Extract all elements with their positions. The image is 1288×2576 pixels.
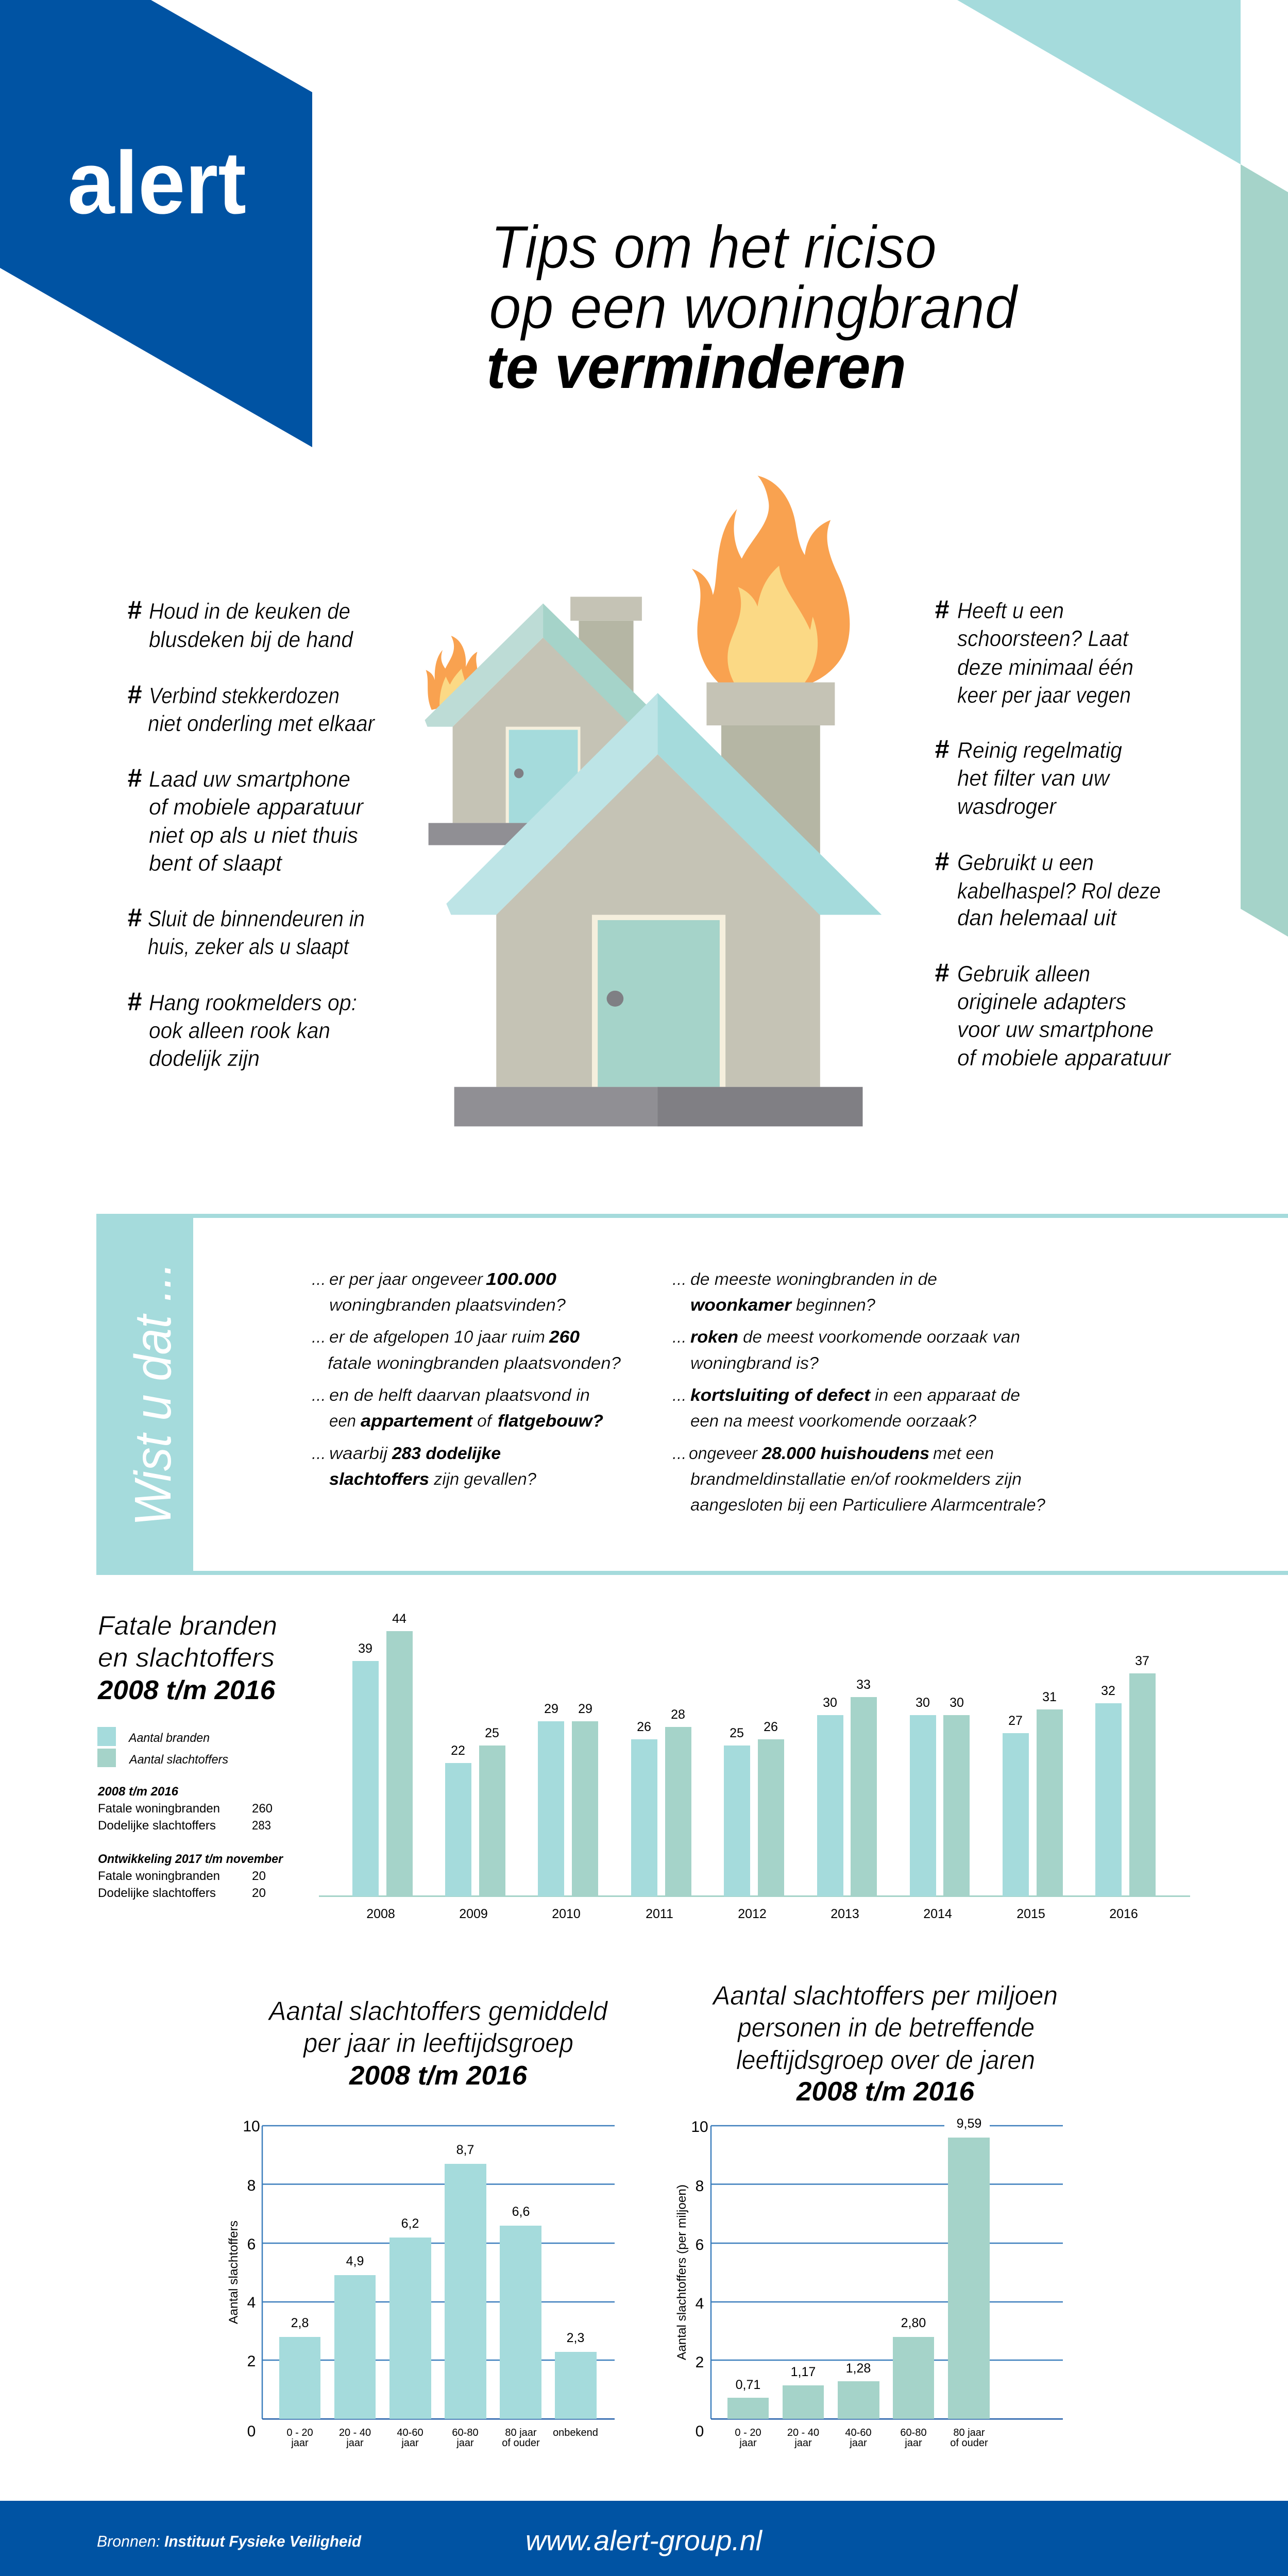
y axis labels: 0 <box>696 2423 704 2440</box>
y axis labels: 2 <box>696 2354 704 2371</box>
x axis labels: 0 - 20 <box>286 2427 313 2438</box>
bars 2014: 2014 <box>923 1907 952 1921</box>
bars 2009: 25 <box>485 1726 499 1740</box>
y axis labels: 10 <box>243 2118 260 2135</box>
bars 2016: 2016 <box>1109 1907 1138 1921</box>
tip: wasdroger: het filter van uw <box>957 766 1111 791</box>
title: op een woningbrand <box>489 274 1019 342</box>
y axis labels: 0 <box>247 2423 256 2440</box>
heading: slachtoffers gemiddeld: Aantal slachtoffers gemiddeld <box>267 1996 608 2026</box>
value labels: 2,3 <box>567 2331 584 2345</box>
tip: adapters: of mobiele apparatuur <box>957 1045 1172 1071</box>
tips right column <box>935 595 1172 1071</box>
summary table: Ontwikkeling 2017 t/m november <box>98 1852 284 1866</box>
tip: smartphone: of mobiele apparatuur <box>149 794 364 820</box>
back house body <box>453 638 645 823</box>
sources: Bronnen: <box>97 2532 160 2550</box>
y axis labels: Aantal slachtoffers <box>227 2221 241 2324</box>
bars 2011 <box>631 1707 691 1921</box>
facts column 1: ... <box>312 1444 326 1463</box>
front house door <box>592 915 725 1087</box>
facts column 2: kortsluiting of defect <box>690 1385 871 1404</box>
y axis labels: 10 <box>691 2119 708 2136</box>
tip: schoorsteen: schoorsteen? Laat <box>957 626 1129 651</box>
heading: slachtoffers per miljoen: Aantal slachtoffers per miljoen <box>711 1981 1058 2011</box>
tip: smartphone: Laad uw smartphone <box>149 767 350 792</box>
bars 2010: 29 <box>578 1702 592 1716</box>
tip: blusdeken <box>127 596 353 652</box>
blue logo panel <box>0 0 312 447</box>
bars 2012: 25 <box>730 1726 744 1740</box>
value labels: 8,7 <box>456 2143 474 2157</box>
facts column 1: ... <box>312 1327 326 1346</box>
back house base <box>429 823 649 845</box>
tip: adapters <box>935 958 1172 1071</box>
tip: blusdeken: blusdeken bij de hand <box>149 627 353 652</box>
value labels: 6,6 <box>512 2205 530 2219</box>
bars 2009: 22 <box>451 1743 465 1758</box>
x axis labels: 0 - 20 <box>735 2427 761 2438</box>
summary table: 260 <box>252 1802 273 1816</box>
facts column 2: ... <box>672 1444 687 1463</box>
facts column 2: beginnen? <box>796 1295 876 1314</box>
summary table: Dodelijke slachtoffers <box>98 1819 216 1833</box>
facts column 1: flatgebouw? <box>498 1411 603 1430</box>
y axis labels: 6 <box>696 2236 704 2253</box>
bars 2008 <box>352 1612 413 1921</box>
facts column 2: woningbrand is? <box>690 1353 819 1372</box>
y axis labels: 6 <box>247 2236 256 2253</box>
x axis labels: jaar <box>346 2437 364 2449</box>
tip: smartphone: # <box>127 764 142 792</box>
facts column 1: 260 <box>549 1327 580 1346</box>
tip: kabelhaspel: dan helemaal uit <box>957 905 1117 930</box>
bars 2008: 39 <box>358 1641 372 1656</box>
bars 2014: 30 <box>950 1696 964 1710</box>
heading: slachtoffers gemiddeld: 2008 t/m 2016 <box>349 2061 528 2091</box>
tip: stekkerdozen: Verbind stekkerdozen <box>149 683 340 708</box>
tip: blusdeken: Houd in de keuken de <box>149 599 350 624</box>
tip: kabelhaspel: Gebruikt u een <box>957 850 1094 875</box>
facts column 1: 283 dodelijke <box>392 1444 501 1463</box>
x axis labels: 80 jaar <box>953 2427 985 2438</box>
heading: wist u dat: Wist u dat ... <box>124 1262 182 1526</box>
bars 2013 <box>817 1677 877 1921</box>
tip: schoorsteen: keer per jaar vegen <box>957 683 1131 708</box>
summary table: Fatale woningbranden <box>98 1869 220 1883</box>
bars 2011: 28 <box>671 1707 685 1722</box>
x axis labels: jaar <box>291 2437 309 2449</box>
facts column 1: woningbranden plaatsvinden? <box>329 1295 566 1314</box>
x axis labels: of ouder <box>950 2437 988 2449</box>
y axis labels: 4 <box>247 2294 256 2311</box>
y axis labels <box>675 2119 708 2440</box>
facts column 2: 28.000 huishoudens <box>761 1444 929 1463</box>
x axis labels: of ouder <box>502 2437 540 2449</box>
heading: fatale branden: 2008 t/m 2016 <box>97 1675 276 1705</box>
facts column 2: een na meest voorkomende oorzaak? <box>690 1411 977 1430</box>
x axis labels <box>735 2427 988 2449</box>
back chimney <box>570 597 642 727</box>
bars <box>727 2138 990 2419</box>
x axis labels: 60-80 <box>452 2427 479 2438</box>
facts column 1: waarbij <box>329 1444 388 1463</box>
bars 2015 <box>1003 1690 1063 1921</box>
value labels: 6,2 <box>401 2216 419 2231</box>
heading: slachtoffers gemiddeld: per jaar in leeftijdsgroep <box>302 2028 573 2058</box>
facts column 2: de meest voorkomende oorzaak van <box>743 1327 1020 1346</box>
bars 2012 <box>724 1720 784 1921</box>
summary table: 283 <box>252 1819 271 1833</box>
bar chart: fatale branden en slachtoffers <box>319 1612 1190 1921</box>
heading: slachtoffers per miljoen <box>711 1981 1058 2107</box>
tip: smartphone <box>127 764 364 876</box>
summary table <box>97 1785 284 1900</box>
facts column 2: brandmeldinstallatie en/of rookmelders zijn <box>690 1469 1022 1488</box>
tip: schoorsteen: Heeft u een <box>957 598 1064 623</box>
bars 2016 <box>1095 1654 1156 1921</box>
facts column 1: een <box>329 1411 356 1430</box>
tip: adapters: originele adapters <box>957 989 1126 1014</box>
website: www.alert-group.nl <box>526 2524 763 2556</box>
heading: fatale branden: en slachtoffers <box>98 1643 275 1673</box>
heading: slachtoffers gemiddeld <box>267 1996 608 2091</box>
value labels: 1,28 <box>846 2361 871 2376</box>
facts column 2: ... <box>672 1385 687 1404</box>
panel: wist u dat <box>96 1214 1288 1575</box>
facts column 2: ... <box>672 1269 687 1289</box>
facts column 1 <box>312 1269 621 1488</box>
tips left column <box>127 596 376 1071</box>
bars 2012: 26 <box>764 1720 778 1734</box>
legend: Aantal slachtoffers <box>128 1753 228 1767</box>
y axis labels: 2 <box>247 2353 256 2370</box>
heading: slachtoffers per miljoen: leeftijdsgroep over de jaren <box>736 2045 1035 2075</box>
value labels: 0,71 <box>736 2378 760 2392</box>
house illustration <box>425 476 882 1126</box>
bars 2010 <box>538 1702 598 1921</box>
footer <box>0 2501 1288 2576</box>
bars 2011: 26 <box>637 1720 651 1734</box>
summary table: 2008 t/m 2016 <box>97 1785 179 1799</box>
bars 2010: 2010 <box>552 1907 581 1921</box>
x axis labels: onbekend <box>553 2427 598 2438</box>
bars 2015: 27 <box>1008 1714 1023 1728</box>
x axis labels: jaar <box>401 2437 419 2449</box>
tip: binnendeuren <box>127 903 365 959</box>
y axis labels: 8 <box>696 2178 704 2195</box>
tip: binnendeuren: Sluit de binnendeuren in <box>148 906 365 931</box>
facts column 2: ... <box>672 1327 687 1346</box>
x axis labels: jaar <box>904 2437 922 2449</box>
x axis labels: jaar <box>794 2437 812 2449</box>
tip: rookmelders: Hang rookmelders op: <box>149 990 357 1015</box>
summary table: 20 <box>252 1886 266 1900</box>
bars 2012: 2012 <box>738 1907 767 1921</box>
back house roof <box>425 603 647 727</box>
x axis labels: 80 jaar <box>505 2427 537 2438</box>
bars 2013: 2013 <box>831 1907 859 1921</box>
decorative side: green band <box>1241 164 1288 937</box>
bar chart: slachtoffers per leeftijdsgroep <box>227 2118 615 2449</box>
bars 2009 <box>445 1726 505 1921</box>
tip: blusdeken: # <box>127 596 142 624</box>
bar chart: slachtoffers per miljoen <box>675 2116 1063 2449</box>
logo: alert: alert <box>67 133 246 232</box>
icon: small flame <box>426 636 478 710</box>
value labels <box>736 2116 981 2392</box>
facts column 1: ... <box>312 1385 326 1404</box>
heading: slachtoffers per miljoen: personen in de betreffende <box>737 2013 1035 2043</box>
x axis labels: 40-60 <box>845 2427 872 2438</box>
y axis labels: 8 <box>247 2177 256 2194</box>
bars 2008: 44 <box>392 1612 406 1626</box>
big chimney <box>706 682 835 903</box>
value labels: 9,59 <box>957 2116 981 2131</box>
bars 2011: 2011 <box>646 1907 673 1921</box>
tip: schoorsteen: # <box>935 595 949 624</box>
bars <box>279 2164 597 2419</box>
panel frame <box>96 1214 1288 1575</box>
tip: schoorsteen <box>935 595 1133 708</box>
tip: kabelhaspel: # <box>935 847 949 876</box>
tip: wasdroger: wasdroger <box>957 794 1057 819</box>
title: te verminderen <box>486 333 906 401</box>
facts column 2: in een apparaat de <box>875 1385 1020 1404</box>
bars 2009: 2009 <box>459 1907 488 1921</box>
x axis labels: 40-60 <box>397 2427 423 2438</box>
tip: wasdroger: Reinig regelmatig <box>957 738 1122 763</box>
bars 2014: 30 <box>916 1696 930 1710</box>
bars 2014 <box>910 1696 970 1921</box>
bars 2016: 32 <box>1101 1684 1115 1698</box>
tip: smartphone: bent of slaapt <box>149 851 283 876</box>
value labels: 2,8 <box>291 2316 309 2330</box>
tip: smartphone: niet op als u niet thuis <box>149 823 358 848</box>
tip: wasdroger <box>935 735 1122 819</box>
facts column 1: fatale woningbranden plaatsvonden? <box>328 1353 621 1372</box>
decorative corner: teal triangle <box>957 0 1241 164</box>
bars 2008: 2008 <box>366 1907 395 1921</box>
facts column 2: de meeste woningbranden in de <box>690 1269 937 1289</box>
legend <box>97 1727 228 1767</box>
summary table: Fatale woningbranden <box>98 1802 220 1816</box>
x axis labels: jaar <box>456 2437 474 2449</box>
facts column 2: roken <box>690 1327 738 1346</box>
tip: kabelhaspel: kabelhaspel? Rol deze <box>957 878 1161 904</box>
icon: big flame <box>692 476 850 682</box>
bars 2016: 37 <box>1135 1654 1149 1668</box>
tip: binnendeuren: # <box>127 903 142 932</box>
facts column 1: er de afgelopen 10 jaar ruim <box>329 1327 545 1346</box>
legend: Aantal branden <box>128 1731 210 1745</box>
facts column 2: woonkamer <box>690 1295 792 1314</box>
facts column 2: aangesloten bij een Particuliere Alarmcentrale? <box>690 1495 1046 1514</box>
bars 2015: 2015 <box>1016 1907 1045 1921</box>
title <box>486 213 1019 401</box>
x axis labels: 20 - 40 <box>339 2427 371 2438</box>
tip: stekkerdozen: niet onderling met elkaar <box>148 711 376 736</box>
x axis labels: jaar <box>849 2437 867 2449</box>
front house base <box>454 1087 862 1126</box>
facts column 1: er per jaar ongeveer <box>329 1269 484 1289</box>
front house body <box>496 754 820 1087</box>
facts column 2 <box>672 1269 1046 1514</box>
tip: adapters: Gebruik alleen <box>957 961 1090 987</box>
bars 2010: 29 <box>544 1702 558 1716</box>
value labels: 1,17 <box>791 2365 816 2379</box>
tip: stekkerdozen: # <box>127 680 142 709</box>
x axis labels: jaar <box>739 2437 757 2449</box>
tip: rookmelders <box>127 987 357 1071</box>
x axis labels: 60-80 <box>900 2427 927 2438</box>
tip: schoorsteen: deze minimaal één <box>957 655 1133 680</box>
summary table: 20 <box>252 1869 266 1883</box>
heading: fatale branden <box>97 1611 277 1705</box>
value labels <box>291 2143 584 2345</box>
summary table: Dodelijke slachtoffers <box>98 1886 216 1900</box>
facts column 1: of <box>477 1411 494 1430</box>
title: Tips om het riciso <box>490 213 937 281</box>
tip: rookmelders: dodelijk zijn <box>149 1046 260 1071</box>
facts column 1: ... <box>312 1269 326 1289</box>
heading: slachtoffers per miljoen: 2008 t/m 2016 <box>796 2077 975 2107</box>
facts column 1: 100.000 <box>486 1269 557 1289</box>
tip: adapters: # <box>935 958 949 987</box>
tip: kabelhaspel <box>935 847 1161 930</box>
x axis labels: 20 - 40 <box>787 2427 819 2438</box>
facts column 2: met een <box>933 1444 994 1463</box>
label backing <box>944 2122 990 2138</box>
value labels: 4,9 <box>346 2254 364 2268</box>
y axis labels: 4 <box>696 2295 704 2312</box>
y axis labels <box>227 2118 260 2440</box>
x axis labels <box>286 2427 598 2449</box>
tip: rookmelders: # <box>127 987 142 1016</box>
facts column 2: ongeveer <box>689 1444 758 1463</box>
value labels: 2,80 <box>901 2316 926 2330</box>
bars 2013: 33 <box>856 1677 871 1692</box>
tip: stekkerdozen <box>127 680 376 736</box>
bars 2013: 30 <box>823 1696 837 1710</box>
facts column 1: en de helft daarvan plaatsvond in <box>329 1385 590 1404</box>
front house roof <box>446 693 882 915</box>
facts column 1: appartement <box>361 1411 473 1430</box>
heading: fatale branden: Fatale branden <box>98 1611 277 1641</box>
bars 2015: 31 <box>1042 1690 1057 1704</box>
tip: wasdroger: # <box>935 735 949 764</box>
back house door <box>506 727 581 823</box>
tip: adapters: voor uw smartphone <box>957 1017 1154 1042</box>
facts column 1: slachtoffers <box>329 1469 429 1488</box>
tip: rookmelders: ook alleen rook kan <box>149 1018 330 1043</box>
facts column 1: zijn gevallen? <box>433 1469 537 1488</box>
sources: Instituut Fysieke Veiligheid <box>164 2532 362 2550</box>
tip: binnendeuren: huis, zeker als u slaapt <box>148 934 350 959</box>
y axis labels: Aantal slachtoffers (per miljoen) <box>675 2184 689 2360</box>
